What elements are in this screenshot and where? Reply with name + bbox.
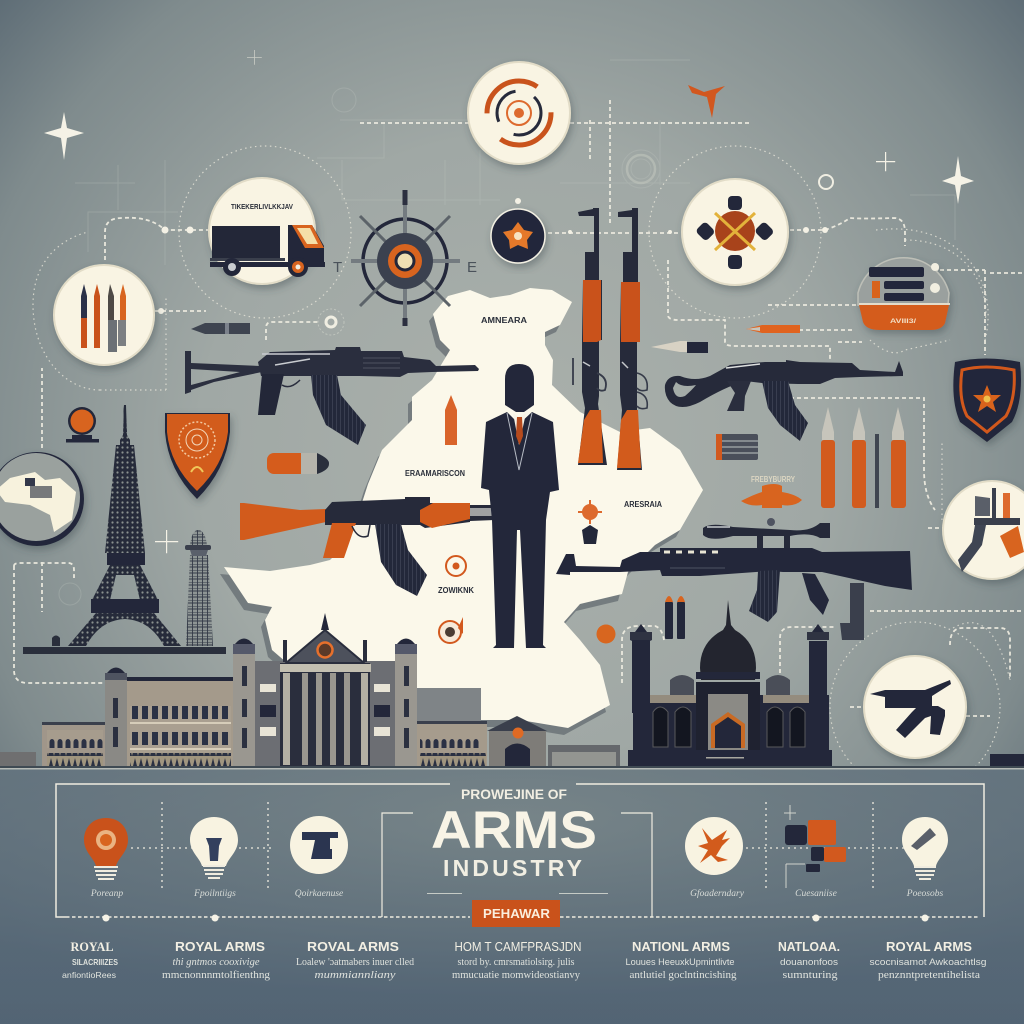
column 2 text: ROYAL ARMS <box>175 939 265 954</box>
column 6 text <box>778 940 840 981</box>
title: INDUSTRY <box>443 855 582 881</box>
two capsules <box>665 596 685 639</box>
orange optic <box>741 475 802 508</box>
icon: pale bulb with cartridge <box>902 817 948 879</box>
map labels: ARESRAIA <box>624 500 662 509</box>
centre towers <box>233 638 417 767</box>
icon: plane circle <box>685 817 743 875</box>
four tall shells <box>821 407 906 508</box>
left tower small <box>105 668 127 767</box>
column 6 text: sumnturing <box>782 970 838 981</box>
column 5 text: Louues HeeuxkUpmintlivte <box>626 957 734 968</box>
column 3 text: mummiannliany <box>314 970 396 981</box>
mosque <box>628 600 832 767</box>
map markers <box>439 395 616 644</box>
column 1 text <box>62 939 118 980</box>
rifle: vertical pair left <box>573 208 607 465</box>
low left wing <box>42 722 105 767</box>
column 1 text: ROYAL <box>70 939 114 954</box>
palace <box>42 613 620 767</box>
businessman figure <box>481 364 559 648</box>
location badge <box>472 900 560 927</box>
column 1 text: SILACRIIIZES <box>72 957 118 967</box>
radio tower <box>185 530 213 646</box>
map labels <box>405 316 662 595</box>
icon: compass wheel: E <box>467 259 477 276</box>
Eiffel tower <box>23 405 226 654</box>
frame lines <box>56 784 984 917</box>
column 5 text: antlutiel goclntincishing <box>630 970 737 981</box>
bullet near map <box>267 453 329 474</box>
column 7 text <box>870 939 986 981</box>
column 5 text: NATIONL ARMS <box>632 940 730 954</box>
icon: small orange plane <box>688 85 725 118</box>
icon: orange bulb <box>84 818 128 879</box>
title: ARMS <box>431 801 597 860</box>
icon captions <box>90 888 944 899</box>
icon: compass wheel <box>333 190 477 326</box>
orange optic: FREBYBURRY <box>751 475 796 484</box>
icon captions: Poeosobs <box>906 889 944 899</box>
icon: star shield <box>953 358 1021 442</box>
icon captions: Qoirkaenuse <box>295 889 343 899</box>
map labels: ERAAMARISCON <box>405 469 465 478</box>
column 4 text: mmucuatie momwideostianvy <box>452 970 580 981</box>
dotted connector network <box>14 100 1024 725</box>
small gauge medallions <box>318 155 833 335</box>
map labels: AMNEARA <box>481 316 527 325</box>
column 3 text <box>296 939 414 981</box>
rifle: vertical pair right <box>617 208 647 470</box>
map of Pakistan <box>220 288 703 735</box>
rifle: loop stock AK <box>665 360 903 441</box>
column 2 text: thi gntmos cooxivige <box>172 957 260 968</box>
column 7 text: ROYAL ARMS <box>886 939 972 954</box>
panel: ammunition badge: AVIII3/ <box>890 318 916 325</box>
column 4 text: stord by. cmrsmatiolsirg. julis <box>458 957 575 968</box>
icon: pistol circle <box>290 816 348 874</box>
centre building <box>255 613 395 767</box>
icon: truck circle <box>209 178 325 284</box>
icon: pale bulb with pin <box>190 817 238 878</box>
location badge: PEHAWAR <box>483 906 551 921</box>
icon: orange and dark blocks <box>784 805 846 888</box>
column 4 text <box>452 940 582 981</box>
icon: truck circle: TIKEKERLIVLKKJAV <box>231 202 293 211</box>
bullet top left <box>191 323 250 334</box>
column 6 text: douanonfoos <box>780 957 839 967</box>
column 3 text: Loalew 'ɔatmabers inuer clled <box>296 957 414 968</box>
icon: beacon lamp <box>66 407 99 442</box>
rifle: scoped AK <box>556 518 912 640</box>
icon: bullets circle <box>54 265 154 365</box>
panel: lower info band <box>0 768 1024 1024</box>
arcade <box>548 745 620 767</box>
column 7 text: scocnisamot Awkoachtlsg <box>870 957 986 968</box>
column 3 text: ROVAL ARMS <box>307 939 399 954</box>
decorative stars <box>44 50 974 553</box>
icon: compass wheel: T <box>333 259 342 276</box>
icon: globe badge <box>0 452 84 546</box>
column 5 text <box>626 940 737 981</box>
background thin circuit lines <box>59 60 955 605</box>
icon: weapon circle right <box>943 481 1024 579</box>
rifle: folding stock black AK <box>185 347 479 445</box>
icon captions: Poreanp <box>90 889 123 899</box>
icon captions: Fpoilntiigs <box>193 889 236 899</box>
long left wing <box>127 677 233 767</box>
icon captions: Cuesaniise <box>795 889 837 899</box>
panel: ammunition badge <box>858 258 950 330</box>
title: PROWEJINE OF <box>461 787 567 802</box>
right wing <box>417 688 487 767</box>
column 6 text: NATLOAA. <box>778 940 840 954</box>
icon: crest shield <box>165 413 230 499</box>
icon: dark emblem <box>491 209 545 263</box>
column 2 text: mmcnonnnmtolfienthng <box>162 970 270 981</box>
column 2 text <box>162 939 270 981</box>
column 7 text: penznntpretentihelista <box>878 970 981 981</box>
column 4 text: HOM T CAMFPRASJDN <box>454 940 582 954</box>
rifle: orange furniture AK <box>240 497 495 596</box>
icon: weapon circle bottom right <box>864 656 966 758</box>
small orange bullet right <box>746 325 800 333</box>
icon: target circle <box>468 62 570 164</box>
map labels: ZOWIKNK <box>438 586 474 595</box>
magazine clip <box>716 434 758 460</box>
bullet centre right <box>651 341 708 353</box>
title <box>431 787 597 881</box>
ground line <box>0 752 1024 770</box>
icon: ornament circle <box>682 179 788 285</box>
column 1 text: anfiontioRees <box>62 970 116 980</box>
icon captions: Gfoaderndary <box>690 888 745 899</box>
small gatehouse <box>487 716 547 767</box>
